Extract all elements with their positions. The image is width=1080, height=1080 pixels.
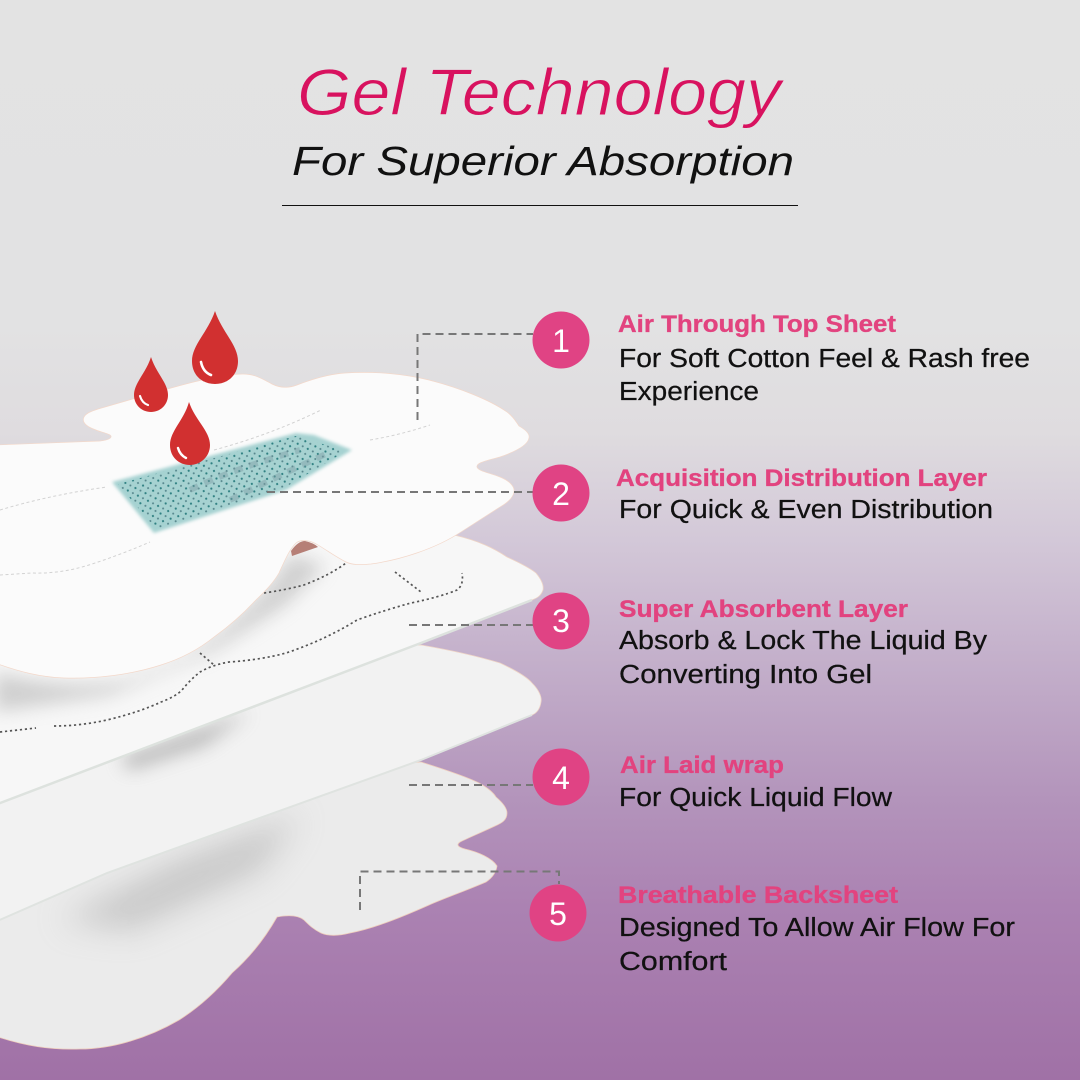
layer 3: super absorbent layer	[0, 520, 543, 805]
callout 3: super absorbent layer	[409, 592, 987, 689]
callout 3: super absorbent layer: Absorb & Lock The Liquid By	[619, 627, 987, 655]
callout 1: air through top sheet: 1	[552, 323, 570, 359]
callout 1: air through top sheet: For Soft Cotton Feel & Rash free	[619, 345, 1030, 373]
callout 3: super absorbent layer: Converting Into Gel	[619, 661, 872, 689]
callout 5: breathable backsheet: Breathable Backsheet	[618, 882, 898, 909]
callout 5: breathable backsheet: Comfort	[619, 948, 727, 976]
title	[282, 55, 798, 206]
callout 3: super absorbent layer: 3	[552, 603, 570, 639]
layer 2: acquisition distribution top pad	[0, 372, 529, 678]
liquid drop: left	[134, 357, 168, 412]
subtitle: For Superior Absorption	[292, 138, 794, 184]
callout 5: breathable backsheet: Designed To Allow Air Flow For	[619, 914, 1016, 942]
callout 1: air through top sheet	[418, 311, 1030, 420]
callout 4: air laid wrap: Air Laid wrap	[620, 752, 784, 779]
callout 4: air laid wrap: For Quick Liquid Flow	[619, 784, 893, 812]
callout 4: air laid wrap	[409, 748, 893, 812]
layer 4: air laid wrap	[0, 645, 541, 922]
callout 2: acquisition distribution layer: Acquisition Distribution Layer	[616, 465, 987, 492]
liquid drop: middle	[170, 402, 210, 465]
title: Gel Technology	[297, 55, 785, 129]
callout 4: air laid wrap: 4	[552, 760, 570, 796]
acquisition layer mesh patch	[112, 433, 352, 533]
stitching on layer 3	[0, 563, 462, 732]
callout 3: super absorbent layer: Super Absorbent Layer	[619, 596, 908, 623]
layer 5: breathable backsheet	[0, 762, 507, 1049]
callout 1: air through top sheet: Experience	[619, 378, 759, 406]
callout 2: acquisition distribution layer: For Quick & Even Distribution	[619, 496, 993, 524]
callout 5: breathable backsheet: 5	[549, 896, 567, 932]
callout 2: acquisition distribution layer: 2	[552, 476, 570, 512]
faint stitching on top pad	[0, 410, 430, 575]
callout 2: acquisition distribution layer	[267, 464, 993, 524]
callout 5: breathable backsheet	[360, 872, 1016, 976]
callout 1: air through top sheet: Air Through Top Sheet	[618, 311, 896, 338]
liquid drop: large	[192, 311, 238, 384]
layered sanitary pad illustration	[0, 311, 543, 1049]
